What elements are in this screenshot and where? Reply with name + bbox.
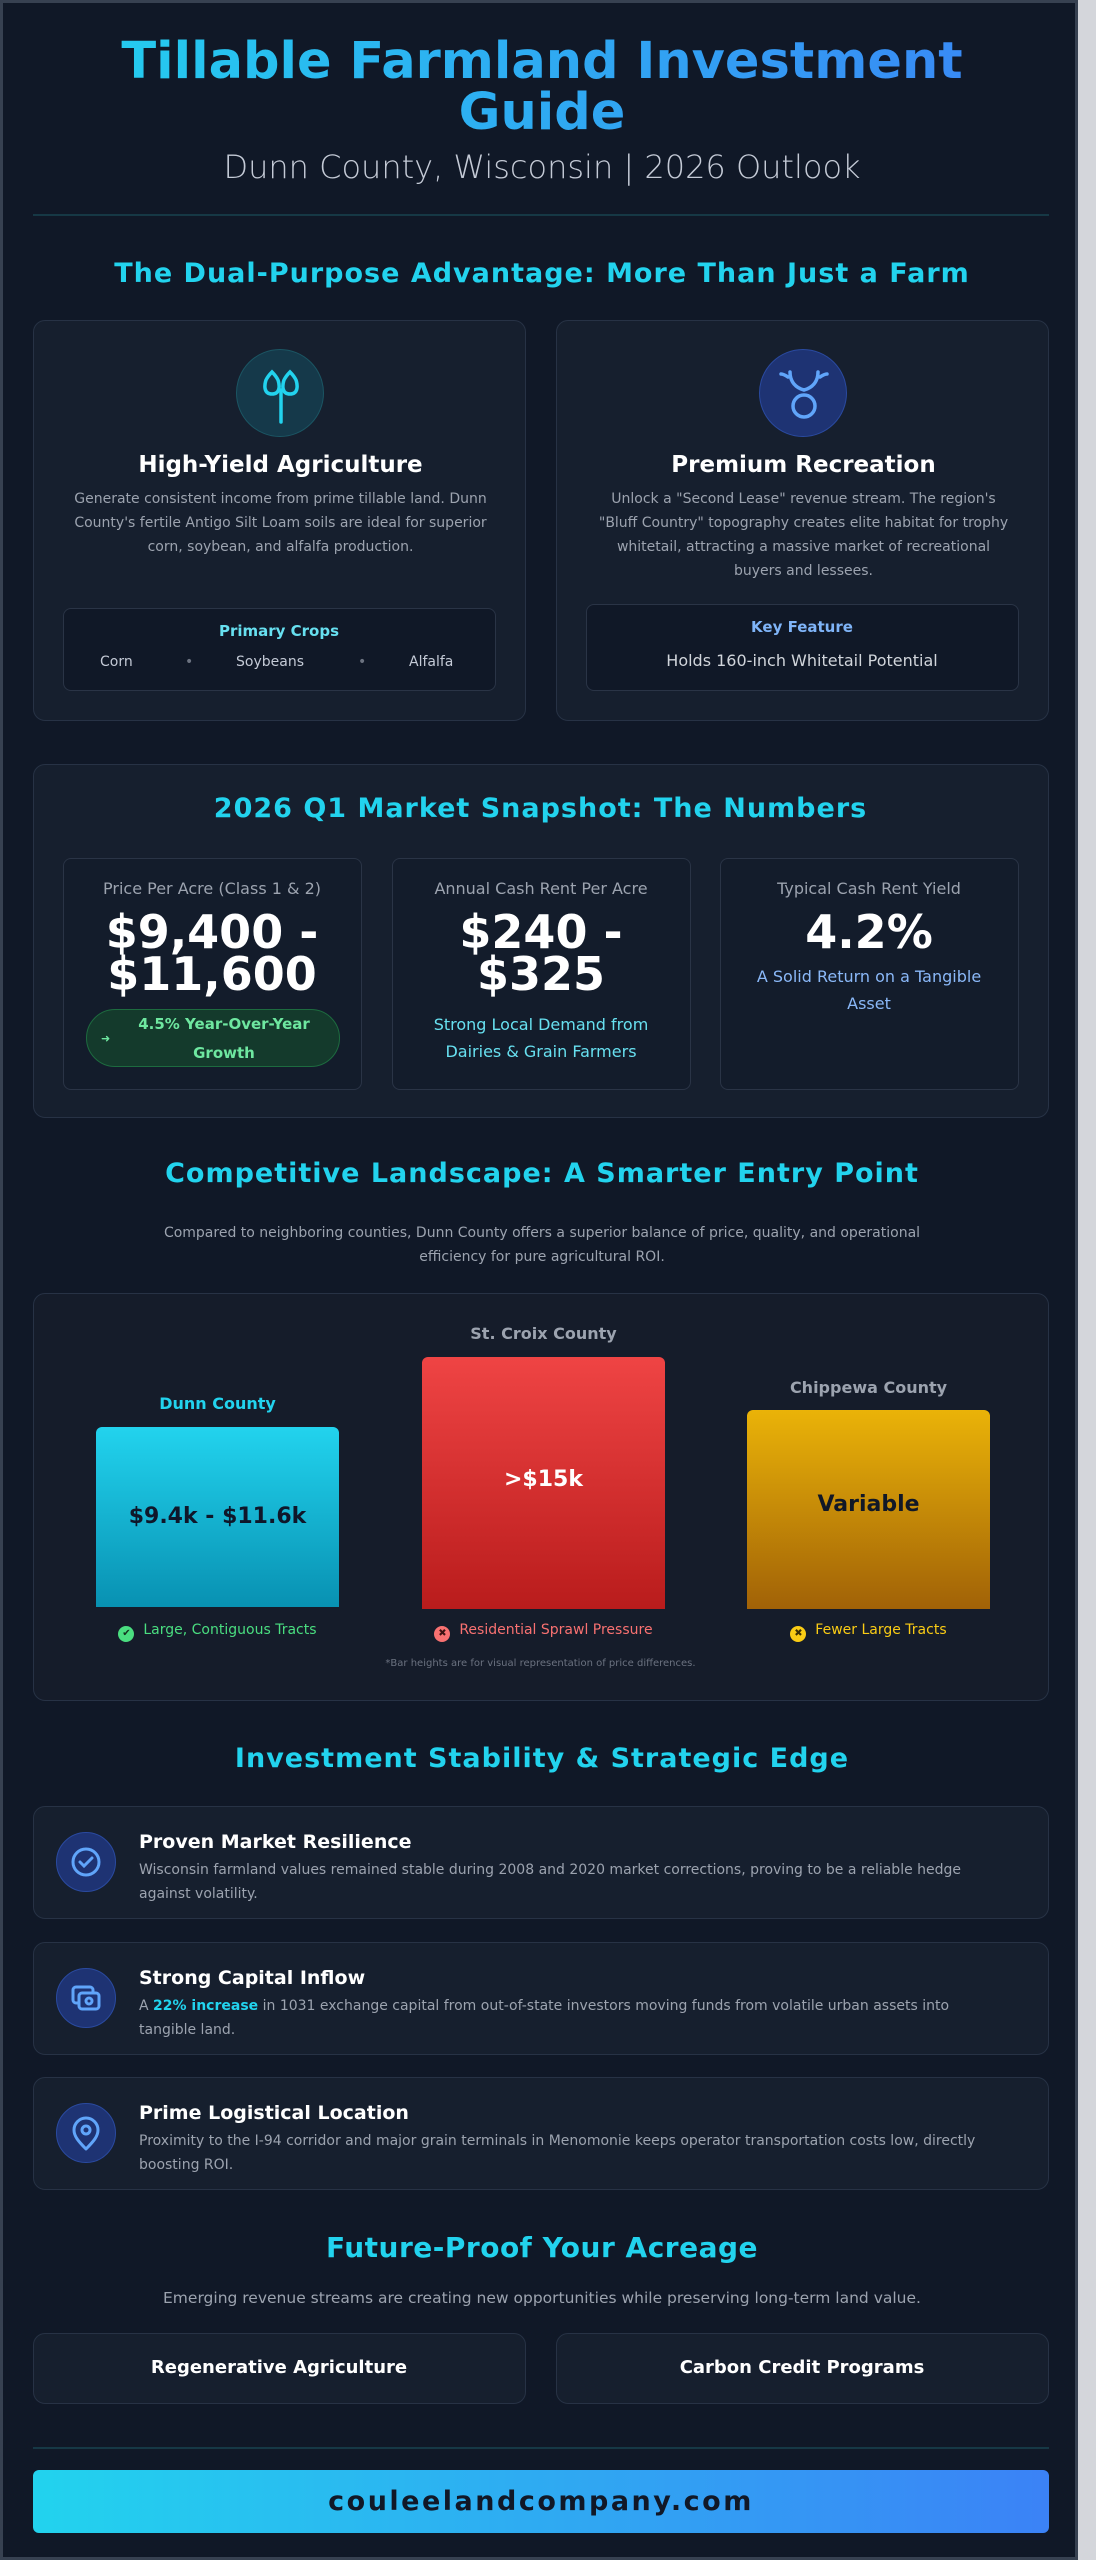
stat: cash rent <box>392 858 691 1090</box>
box: carbon: Carbon Credit Programs <box>680 2357 924 2378</box>
badge: growth: 4.5% Year-Over-Year <box>138 1015 310 1033</box>
box: primary crops <box>63 608 496 691</box>
box: key feature <box>586 604 1019 691</box>
heading: future-proof: Future-Proof Your Acreage <box>326 2231 758 2264</box>
bar: chippewa: Variable <box>817 1492 920 1517</box>
bar chart <box>33 1293 1049 1701</box>
bar: chippewa: Chippewa County <box>790 1378 947 1397</box>
description: Unlock a "Second Lease" revenue stream. The region's "Bluff Country" topography creates elite habitat for trophy whitetail, attracting a massive market of recreational buyers and lessees. <box>599 491 1008 579</box>
stat: yield: A Solid Return on a Tangible Asset <box>757 967 981 1013</box>
description: Generate consistent income from prime tillable land. Dunn County's fertile Antigo Silt Loam soils are ideal for superior corn, soybean, and alfalfa production. <box>74 491 487 555</box>
footer url bar <box>33 2470 1049 2533</box>
title: Guide <box>459 83 625 142</box>
icon: check <box>56 1832 116 1892</box>
card title: Premium Recreation <box>671 452 936 478</box>
card title: High-Yield Agriculture <box>138 452 423 478</box>
box: primary crops: Primary Crops <box>219 622 339 640</box>
box: carbon <box>556 2333 1049 2404</box>
item: location: Proximity to the I-94 corridor and major grain terminals in Menomonie keeps operator transportation costs low, directly boosting ROI. <box>139 2133 975 2173</box>
legend: chippewa: ✖ <box>794 1628 803 1639</box>
item: capital inflow: A 22% increase in 1031 exchange capital from out-of-state investors moving funds from volatile urban assets into tangible land. <box>139 1998 949 2038</box>
item: resilience <box>33 1806 1049 1919</box>
stat: yield: 4.2% <box>805 905 933 959</box>
intro text: Compared to neighboring counties, Dunn County offers a superior balance of price, quality, and operational efficiency for pure agricultural ROI. <box>164 1225 920 1265</box>
stat: price per acre: Price Per Acre (Class 1 & 2) <box>103 879 321 898</box>
stat: price per acre: $11,600 <box>107 947 317 1001</box>
item: capital inflow <box>33 1942 1049 2055</box>
panel: premium recreation <box>556 320 1049 721</box>
box: key feature: Key Feature <box>751 618 853 636</box>
legend: dunn <box>118 1622 317 1642</box>
stat: cash rent: Strong Local Demand from Dairies & Grain Farmers <box>434 1015 648 1061</box>
box: primary crops: Corn <box>100 654 133 670</box>
item: resilience: Proven Market Resilience <box>139 1831 412 1853</box>
subtitle: Dunn County, Wisconsin | 2026 Outlook <box>223 148 861 186</box>
stat: price per acre <box>63 858 362 1090</box>
badge: growth <box>86 1009 340 1067</box>
bar: chippewa <box>747 1378 990 1609</box>
bar: dunn: Dunn County <box>159 1394 276 1413</box>
stat: cash rent: $240 - <box>459 905 623 959</box>
stat: cash rent: $325 <box>477 947 605 1001</box>
item: location <box>33 2077 1049 2190</box>
intro text: Emerging revenue streams are creating new opportunities while preserving long-term land value. <box>163 2289 921 2307</box>
box: primary crops: • <box>358 654 366 670</box>
bar: st croix: >$15k <box>504 1467 583 1492</box>
bar: dunn: $9.4k - $11.6k <box>129 1504 306 1529</box>
stat: price per acre: $9,400 - <box>106 905 318 959</box>
box: key feature: Holds 160-inch Whitetail Potential <box>666 651 938 670</box>
icon: pin <box>56 2103 116 2163</box>
box: primary crops: • <box>185 654 193 670</box>
legend: chippewa <box>790 1622 947 1642</box>
title <box>3 36 1081 138</box>
bar: st croix: St. Croix County <box>470 1324 617 1343</box>
footer url bar: couleelandcompany.com <box>328 2486 754 2517</box>
panel: market snapshot <box>33 764 1049 1118</box>
stat: yield <box>720 858 1019 1090</box>
stat: yield: Typical Cash Rent Yield <box>777 879 961 898</box>
heading: dual-purpose: The Dual-Purpose Advantage: More Than Just a Farm <box>114 258 970 289</box>
badge: growth: Growth <box>193 1044 255 1062</box>
box: regenerative: Regenerative Agriculture <box>151 2357 407 2378</box>
icon: money <box>56 1968 116 2028</box>
stat: cash rent: Annual Cash Rent Per Acre <box>434 879 648 898</box>
legend: dunn: Large, Contiguous Tracts <box>143 1622 317 1638</box>
bar: dunn <box>96 1394 339 1607</box>
box: primary crops: Soybeans <box>236 654 304 670</box>
icon: wheat <box>236 349 324 437</box>
legend: chippewa: Fewer Large Tracts <box>815 1622 947 1638</box>
item: resilience: Wisconsin farmland values remained stable during 2008 and 2020 market corrections, proving to be a reliable hedge against volatility. <box>139 1862 961 1902</box>
legend: st croix: ✖ <box>438 1628 447 1639</box>
legend: st croix: Residential Sprawl Pressure <box>459 1622 653 1638</box>
heading: competitive landscape: Competitive Landscape: A Smarter Entry Point <box>165 1158 919 1189</box>
footnote: *Bar heights are for visual representation of price differences. <box>385 1658 696 1669</box>
badge: growth: ➜ <box>101 1032 110 1045</box>
title: Tillable Farmland Investment <box>121 32 963 91</box>
item: capital inflow: Strong Capital Inflow <box>139 1967 365 1989</box>
bar: st croix <box>422 1324 665 1609</box>
panel: high-yield agriculture <box>33 320 526 721</box>
icon: antlers <box>759 349 847 437</box>
box: regenerative <box>33 2333 526 2404</box>
heading: 2026 Q1 Market Snapshot: The Numbers <box>214 793 867 824</box>
item: location: Prime Logistical Location <box>139 2102 409 2124</box>
box: primary crops: Alfalfa <box>409 654 453 670</box>
legend: dunn: ✔ <box>122 1628 131 1639</box>
heading: stability: Investment Stability & Strategic Edge <box>235 1743 849 1774</box>
